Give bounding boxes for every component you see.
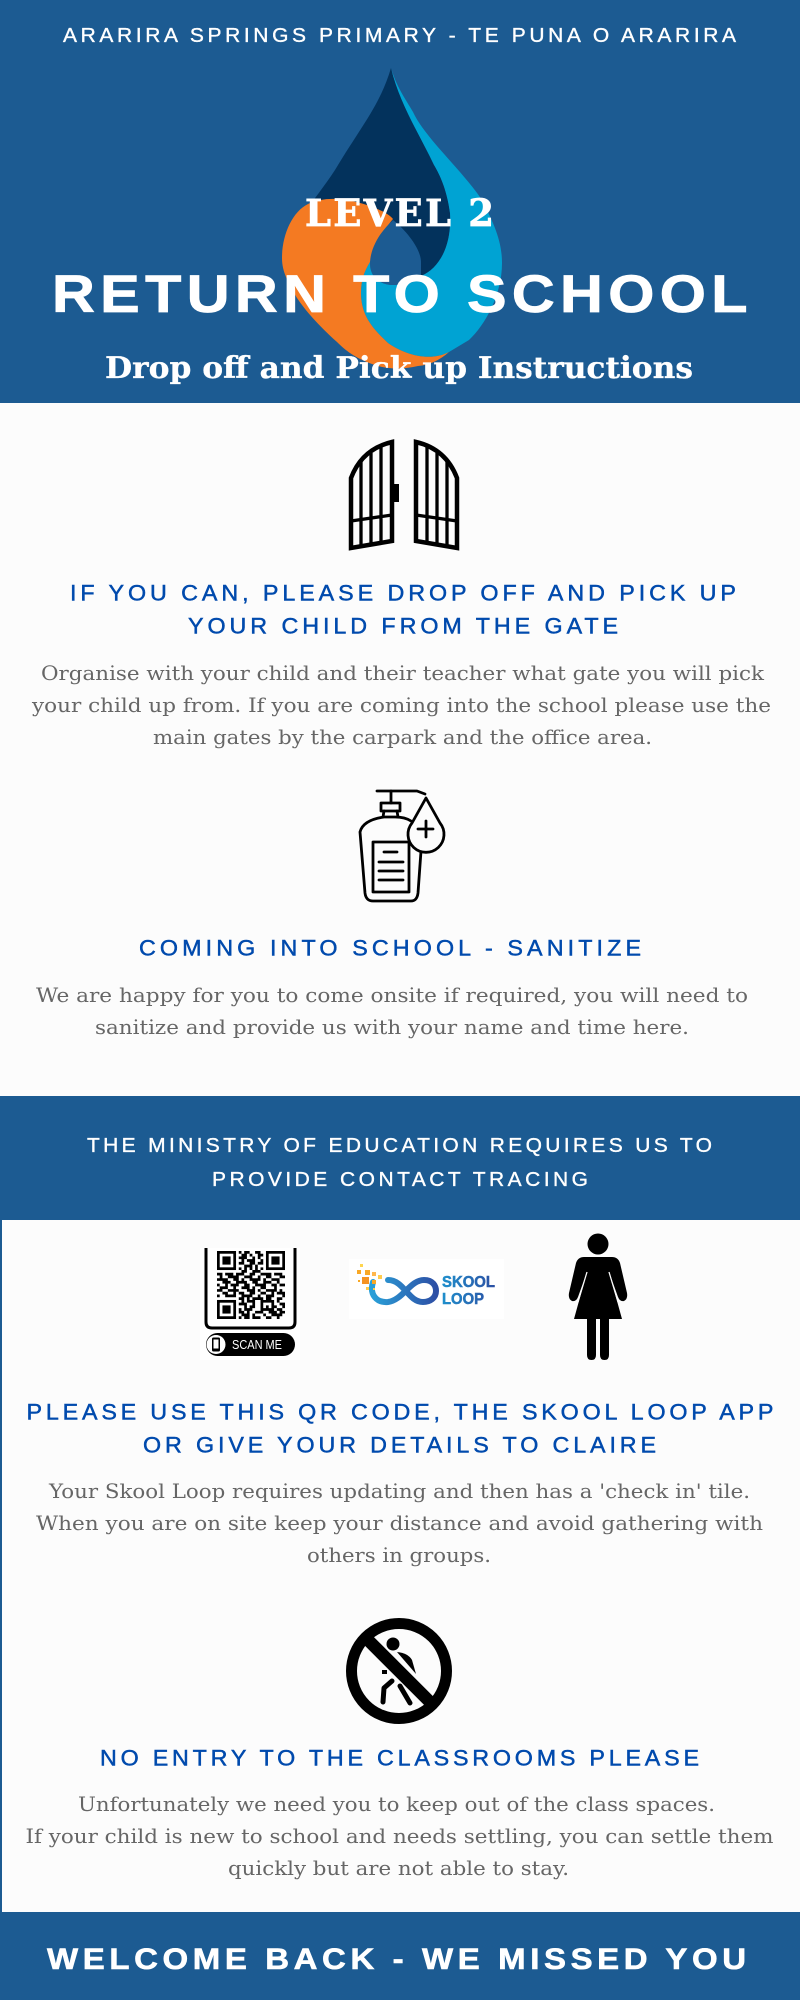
text: sanitize instructions: [36, 983, 748, 1039]
school name: ARARIRA SPRINGS PRIMARY - TE PUNA O ARARIRA: [63, 24, 736, 47]
icon: woman figure (Claire): [569, 1234, 627, 1360]
heading: QR code or Skool Loop: OR GIVE YOUR DETAILS TO CLAIRE: [143, 1432, 656, 1457]
panel: lower content frame: [0, 1220, 2, 1912]
text: no entry instructions: Unfortunately we need you to keep out of the class spaces.: [78, 1792, 715, 1816]
level label: LEVEL 2: [305, 191, 494, 235]
icon: school water drop logo: [282, 68, 502, 368]
text: no entry instructions: quickly but are not able to stay.: [228, 1856, 569, 1880]
text: no entry instructions: [26, 1792, 774, 1880]
heading: drop off and pick up: [70, 580, 736, 638]
text: sanitize instructions: sanitize and provide us with your name and time here.: [95, 1015, 689, 1039]
text: check in instructions: Your Skool Loop requires updating and then has a 'check in' tile.: [48, 1479, 750, 1503]
icon: no entry sign: [352, 1624, 446, 1718]
text: check in instructions: When you are on site keep your distance and avoid gathering with: [36, 1511, 763, 1535]
icon: Skool Loop logo: SKOOL: [442, 1274, 495, 1291]
text: check in instructions: others in groups.: [307, 1543, 491, 1567]
text: gate instructions: [31, 661, 771, 749]
text: gate instructions: Organise with your child and their teacher what gate you will pick: [41, 661, 765, 685]
panel: sanitize section: [36, 791, 748, 1039]
text: gate instructions: your child up from. If you are coming into the school please use the: [31, 693, 771, 717]
panel: no entry section: [26, 1624, 774, 1880]
icon: Skool Loop logo: [349, 1259, 504, 1319]
panel: header banner: [0, 0, 800, 403]
text: contact tracing notice: THE MINISTRY OF EDUCATION REQUIRES US TO: [87, 1134, 712, 1157]
panel: footer banner: [0, 1912, 800, 2000]
subtitle: Drop off and Pick up Instructions: [105, 351, 693, 386]
panel: contact tracing banner: [0, 1096, 800, 1220]
icon: hand sanitizer bottle: [360, 791, 444, 901]
panel: check in section: [26, 1234, 773, 1567]
icon: QR code scan me: [200, 1248, 300, 1360]
heading: no entry: NO ENTRY TO THE CLASSROOMS PLEASE: [100, 1745, 699, 1770]
panel: gate pick up section: [31, 442, 771, 749]
heading: drop off and pick up: YOUR CHILD FROM THE GATE: [188, 613, 618, 638]
text: sanitize instructions: We are happy for you to come onsite if required, you will need to: [36, 983, 748, 1007]
heading: drop off and pick up: IF YOU CAN, PLEASE DROP OFF AND PICK UP: [70, 580, 736, 605]
icon: school gates: [351, 442, 457, 548]
heading: QR code or Skool Loop: PLEASE USE THIS QR CODE, THE SKOOL LOOP APP: [26, 1399, 773, 1424]
text: check in instructions: [36, 1479, 763, 1567]
footer message: WELCOME BACK - WE MISSED YOU: [47, 1941, 746, 1976]
heading: sanitize: COMING INTO SCHOOL - SANITIZE: [139, 935, 641, 960]
text: contact tracing notice: PROVIDE CONTACT TRACING: [212, 1168, 588, 1191]
text: no entry instructions: If your child is new to school and needs settling, you can settle them: [26, 1824, 774, 1848]
text: contact tracing notice: [87, 1134, 712, 1191]
icon: QR code scan me: SCAN ME: [232, 1337, 282, 1352]
text: gate instructions: main gates by the carpark and the office area.: [153, 725, 652, 749]
icon: Skool Loop logo: LOOP: [442, 1291, 484, 1308]
main title: RETURN TO SCHOOL: [52, 264, 748, 323]
heading: QR code or Skool Loop: [26, 1399, 773, 1457]
